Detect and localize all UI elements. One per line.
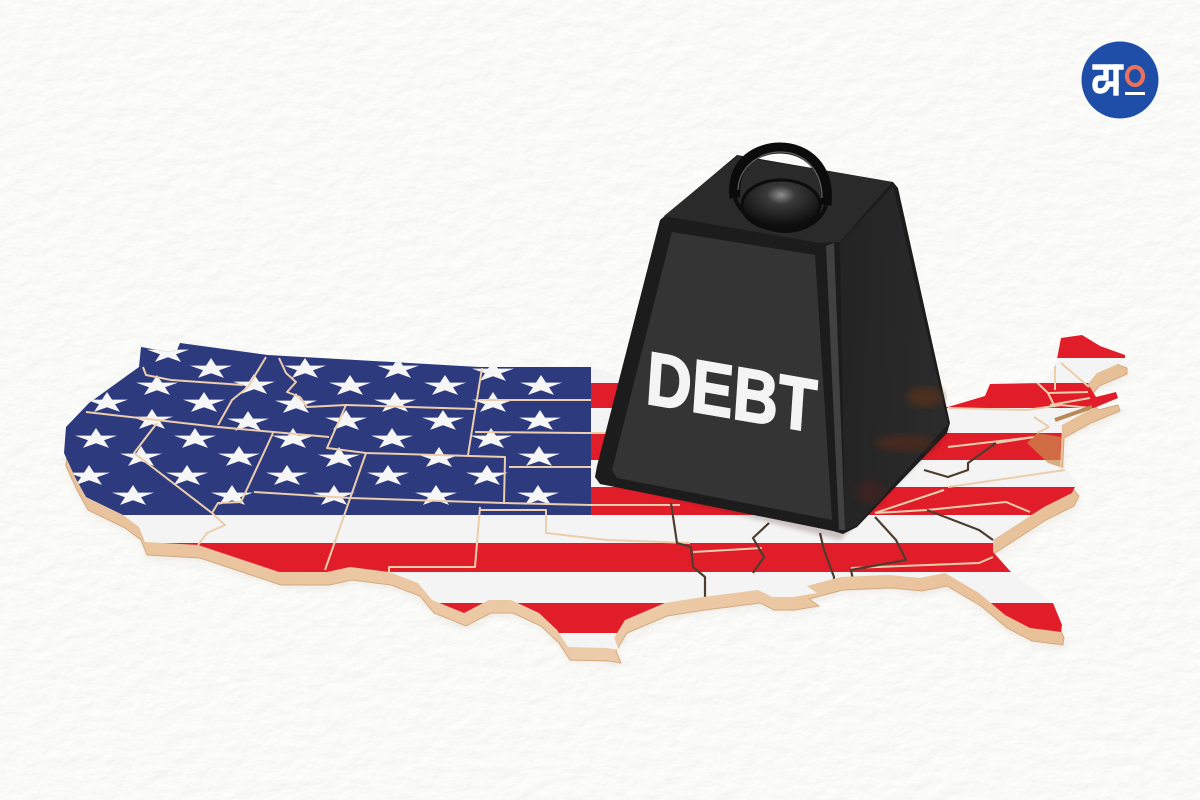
flag red stripes <box>163 335 1125 633</box>
logo badge <box>1082 42 1158 118</box>
logo underline <box>1125 92 1145 95</box>
New Jersey and Chesapeake gold patch <box>1027 433 1061 467</box>
flag stars <box>68 342 562 505</box>
weight silhouette <box>595 155 950 534</box>
state borders <box>86 357 1090 583</box>
logo circle <box>1082 42 1158 118</box>
weight right face <box>840 186 948 530</box>
weight edge ridge <box>826 243 845 530</box>
map soft ground shadow <box>67 351 1128 666</box>
map: United States cut-out with gold edge <box>50 330 1151 666</box>
weight front panel <box>612 232 832 520</box>
weight contact shadow on map <box>652 428 951 542</box>
weight handle base dome <box>742 180 820 230</box>
map flag surface <box>50 330 1151 660</box>
weight top face <box>664 156 892 243</box>
logo coral ring <box>1127 67 1143 85</box>
Long Island <box>1055 407 1092 420</box>
map gold extrusion <box>66 348 1127 663</box>
weight copper reflections <box>856 387 943 504</box>
weight label: DEBT: DEBT <box>644 335 819 448</box>
cracked state borders <box>671 443 996 610</box>
logo white mark <box>1095 67 1121 93</box>
debt weight <box>595 148 950 534</box>
flag blue canton <box>50 330 591 515</box>
weight ring handle <box>735 148 826 231</box>
illustration: debt weight crushing US flag map <box>64 42 1158 666</box>
